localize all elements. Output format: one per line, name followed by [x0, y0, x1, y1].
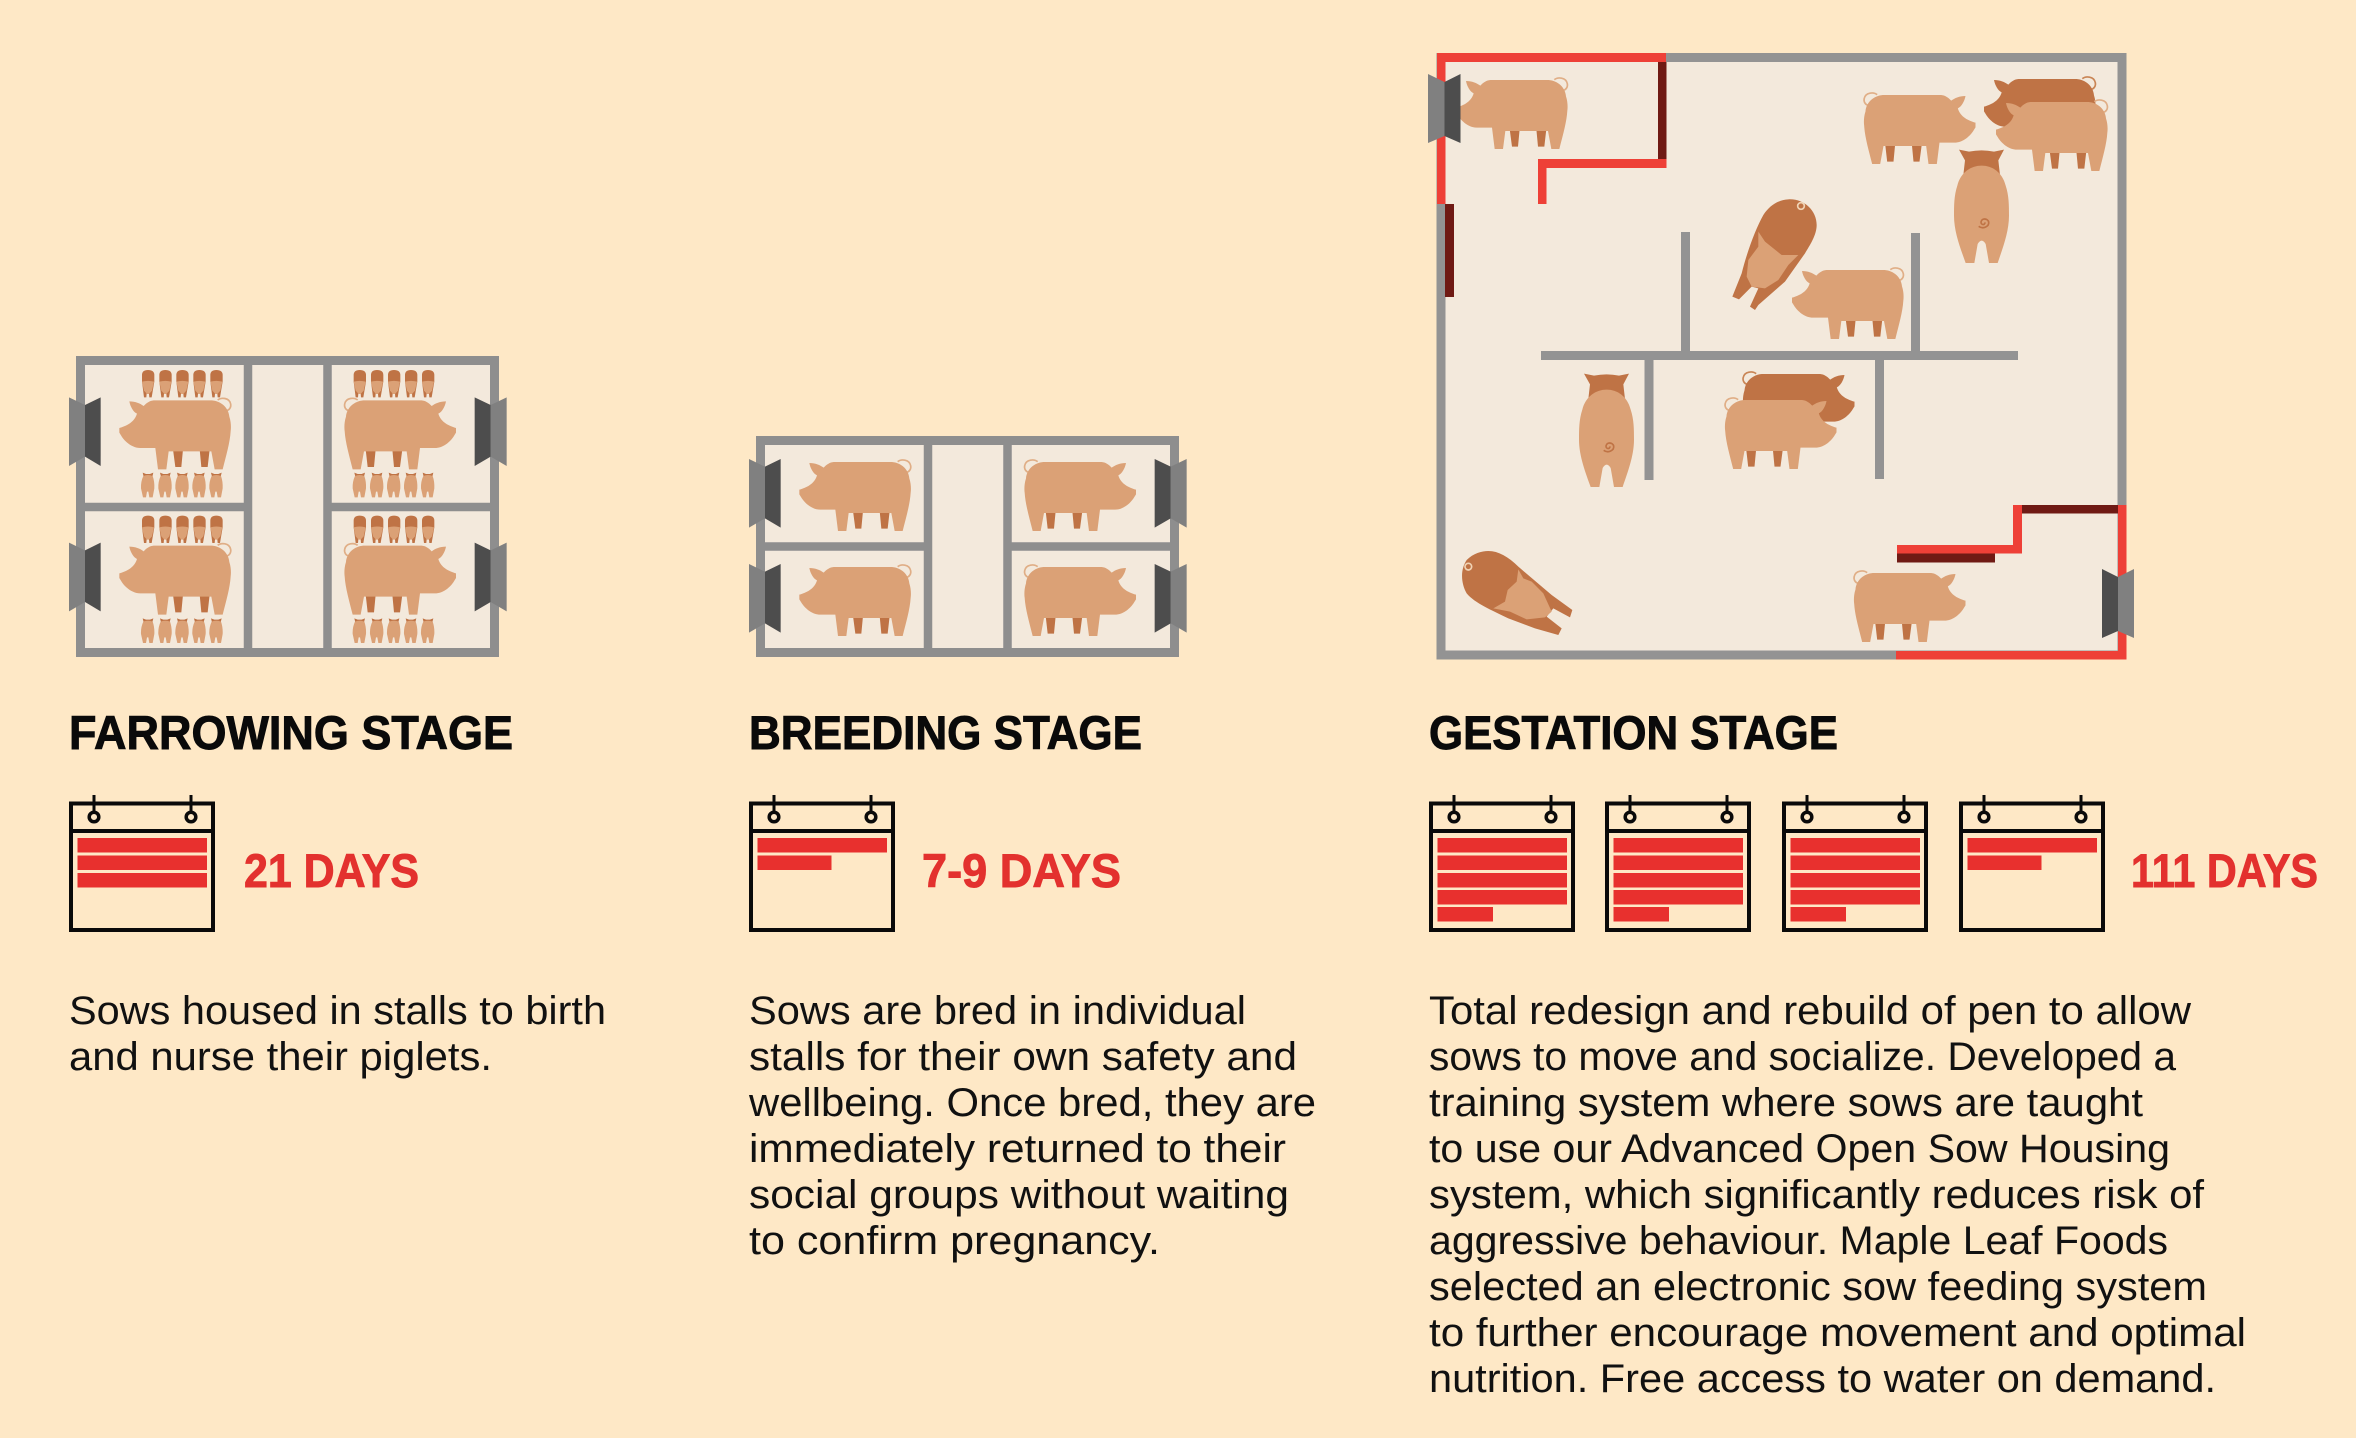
text: gestation description	[1429, 989, 2246, 1401]
calendar 2	[1605, 795, 1751, 930]
text: gestation description: system, which significantly reduces risk of	[1429, 1173, 2205, 1217]
pig: dark pig behind	[1984, 77, 2096, 148]
heading: farrowing: FARROWING STAGE	[69, 706, 513, 759]
red walls: top-left enclosure	[1437, 53, 1666, 297]
text: farrowing description: Sows housed in stalls to birth	[69, 989, 606, 1033]
panel: gestation stage	[1428, 53, 2318, 1401]
text: gestation description: Total redesign and rebuild of pen to allow	[1429, 989, 2191, 1033]
red walls: bottom-right enclosure	[1896, 505, 2126, 660]
text: farrowing description: and nurse their piglets.	[69, 1035, 492, 1079]
heading: gestation: GESTATION STAGE	[1429, 706, 1838, 759]
duration: 7-9 days: 7-9 DAYS	[922, 844, 1121, 897]
pig: stall top right	[1024, 460, 1136, 531]
heading: breeding: BREEDING STAGE	[749, 706, 1142, 759]
panel: farrowing stage	[69, 360, 606, 1079]
icon: calendar, 21 days	[69, 795, 215, 930]
pig: front pig facing left	[1996, 100, 2108, 171]
pig: centre, facing left	[1792, 268, 1904, 339]
text: breeding description: social groups without waiting	[749, 1173, 1289, 1217]
pig: dark pig behind, facing right	[1743, 372, 1854, 443]
pig: stall bottom right	[1024, 565, 1136, 636]
duration: 111 days: 111 DAYS	[2131, 844, 2318, 897]
icon: feeders	[749, 459, 1187, 633]
icon: bottom-right feeder	[2102, 569, 2134, 638]
floor plan: breeding stalls	[749, 440, 1187, 652]
pig: back view, upper right	[1954, 150, 2009, 263]
text: breeding description: Sows are bred in individual	[749, 989, 1246, 1033]
pen: sow with piglets, bottom right	[344, 516, 456, 643]
calendar 3	[1782, 795, 1928, 930]
text: breeding description: immediately returned to their	[749, 1127, 1286, 1171]
duration: 21 days: 21 DAYS	[244, 844, 419, 897]
pen: sow with piglets, top right	[344, 370, 456, 497]
pig: back view, left of divider	[1579, 374, 1634, 487]
floor plan: farrowing pens	[69, 360, 507, 652]
text: gestation description: sows to move and socialize. Developed a	[1429, 1035, 2177, 1079]
pen: sow with piglets, bottom left	[119, 516, 231, 643]
pig: lower right, facing right	[1854, 571, 1966, 642]
text: breeding description	[748, 989, 1316, 1263]
text: gestation description: selected an electronic sow feeding system	[1429, 1265, 2207, 1309]
interior partitions	[1541, 232, 2018, 480]
pig: front pig, facing right	[1725, 398, 1836, 469]
pig: top group, facing right	[1864, 93, 1976, 164]
text: gestation description: aggressive behaviour. Maple Leaf Foods	[1429, 1219, 2168, 1263]
icon: feeders	[69, 397, 507, 611]
text: gestation description: to further encourage movement and optimal	[1429, 1311, 2246, 1355]
calendar 4	[1959, 795, 2105, 930]
text: gestation description: nutrition. Free access to water on demand.	[1429, 1357, 2216, 1401]
calendar 1	[1429, 795, 1575, 930]
text: breeding description: wellbeing. Once bred, they are	[748, 1081, 1316, 1125]
floor plan: open pen	[1428, 53, 2134, 660]
text: gestation description: training system where sows are taught	[1429, 1081, 2143, 1125]
pen: sow with piglets, top left	[119, 370, 231, 497]
text: breeding description: to confirm pregnancy.	[749, 1219, 1160, 1263]
text: gestation description: to use our Advanced Open Sow Housing	[1429, 1127, 2170, 1171]
panel: breeding stage	[748, 440, 1316, 1263]
pig: at top-left feeder	[1456, 78, 1568, 149]
text: farrowing description	[69, 989, 606, 1079]
pig: lying, lower left	[1462, 551, 1572, 635]
icon: top-left feeder	[1428, 74, 1460, 143]
pig: stall bottom left	[799, 565, 911, 636]
pig: lying, upper centre	[1732, 199, 1817, 310]
icons: calendars, 111 days	[1429, 795, 2105, 930]
pig: stall top left	[799, 460, 911, 531]
icon: calendar, 7-9 days	[749, 795, 895, 930]
text: breeding description: stalls for their own safety and	[749, 1035, 1297, 1079]
